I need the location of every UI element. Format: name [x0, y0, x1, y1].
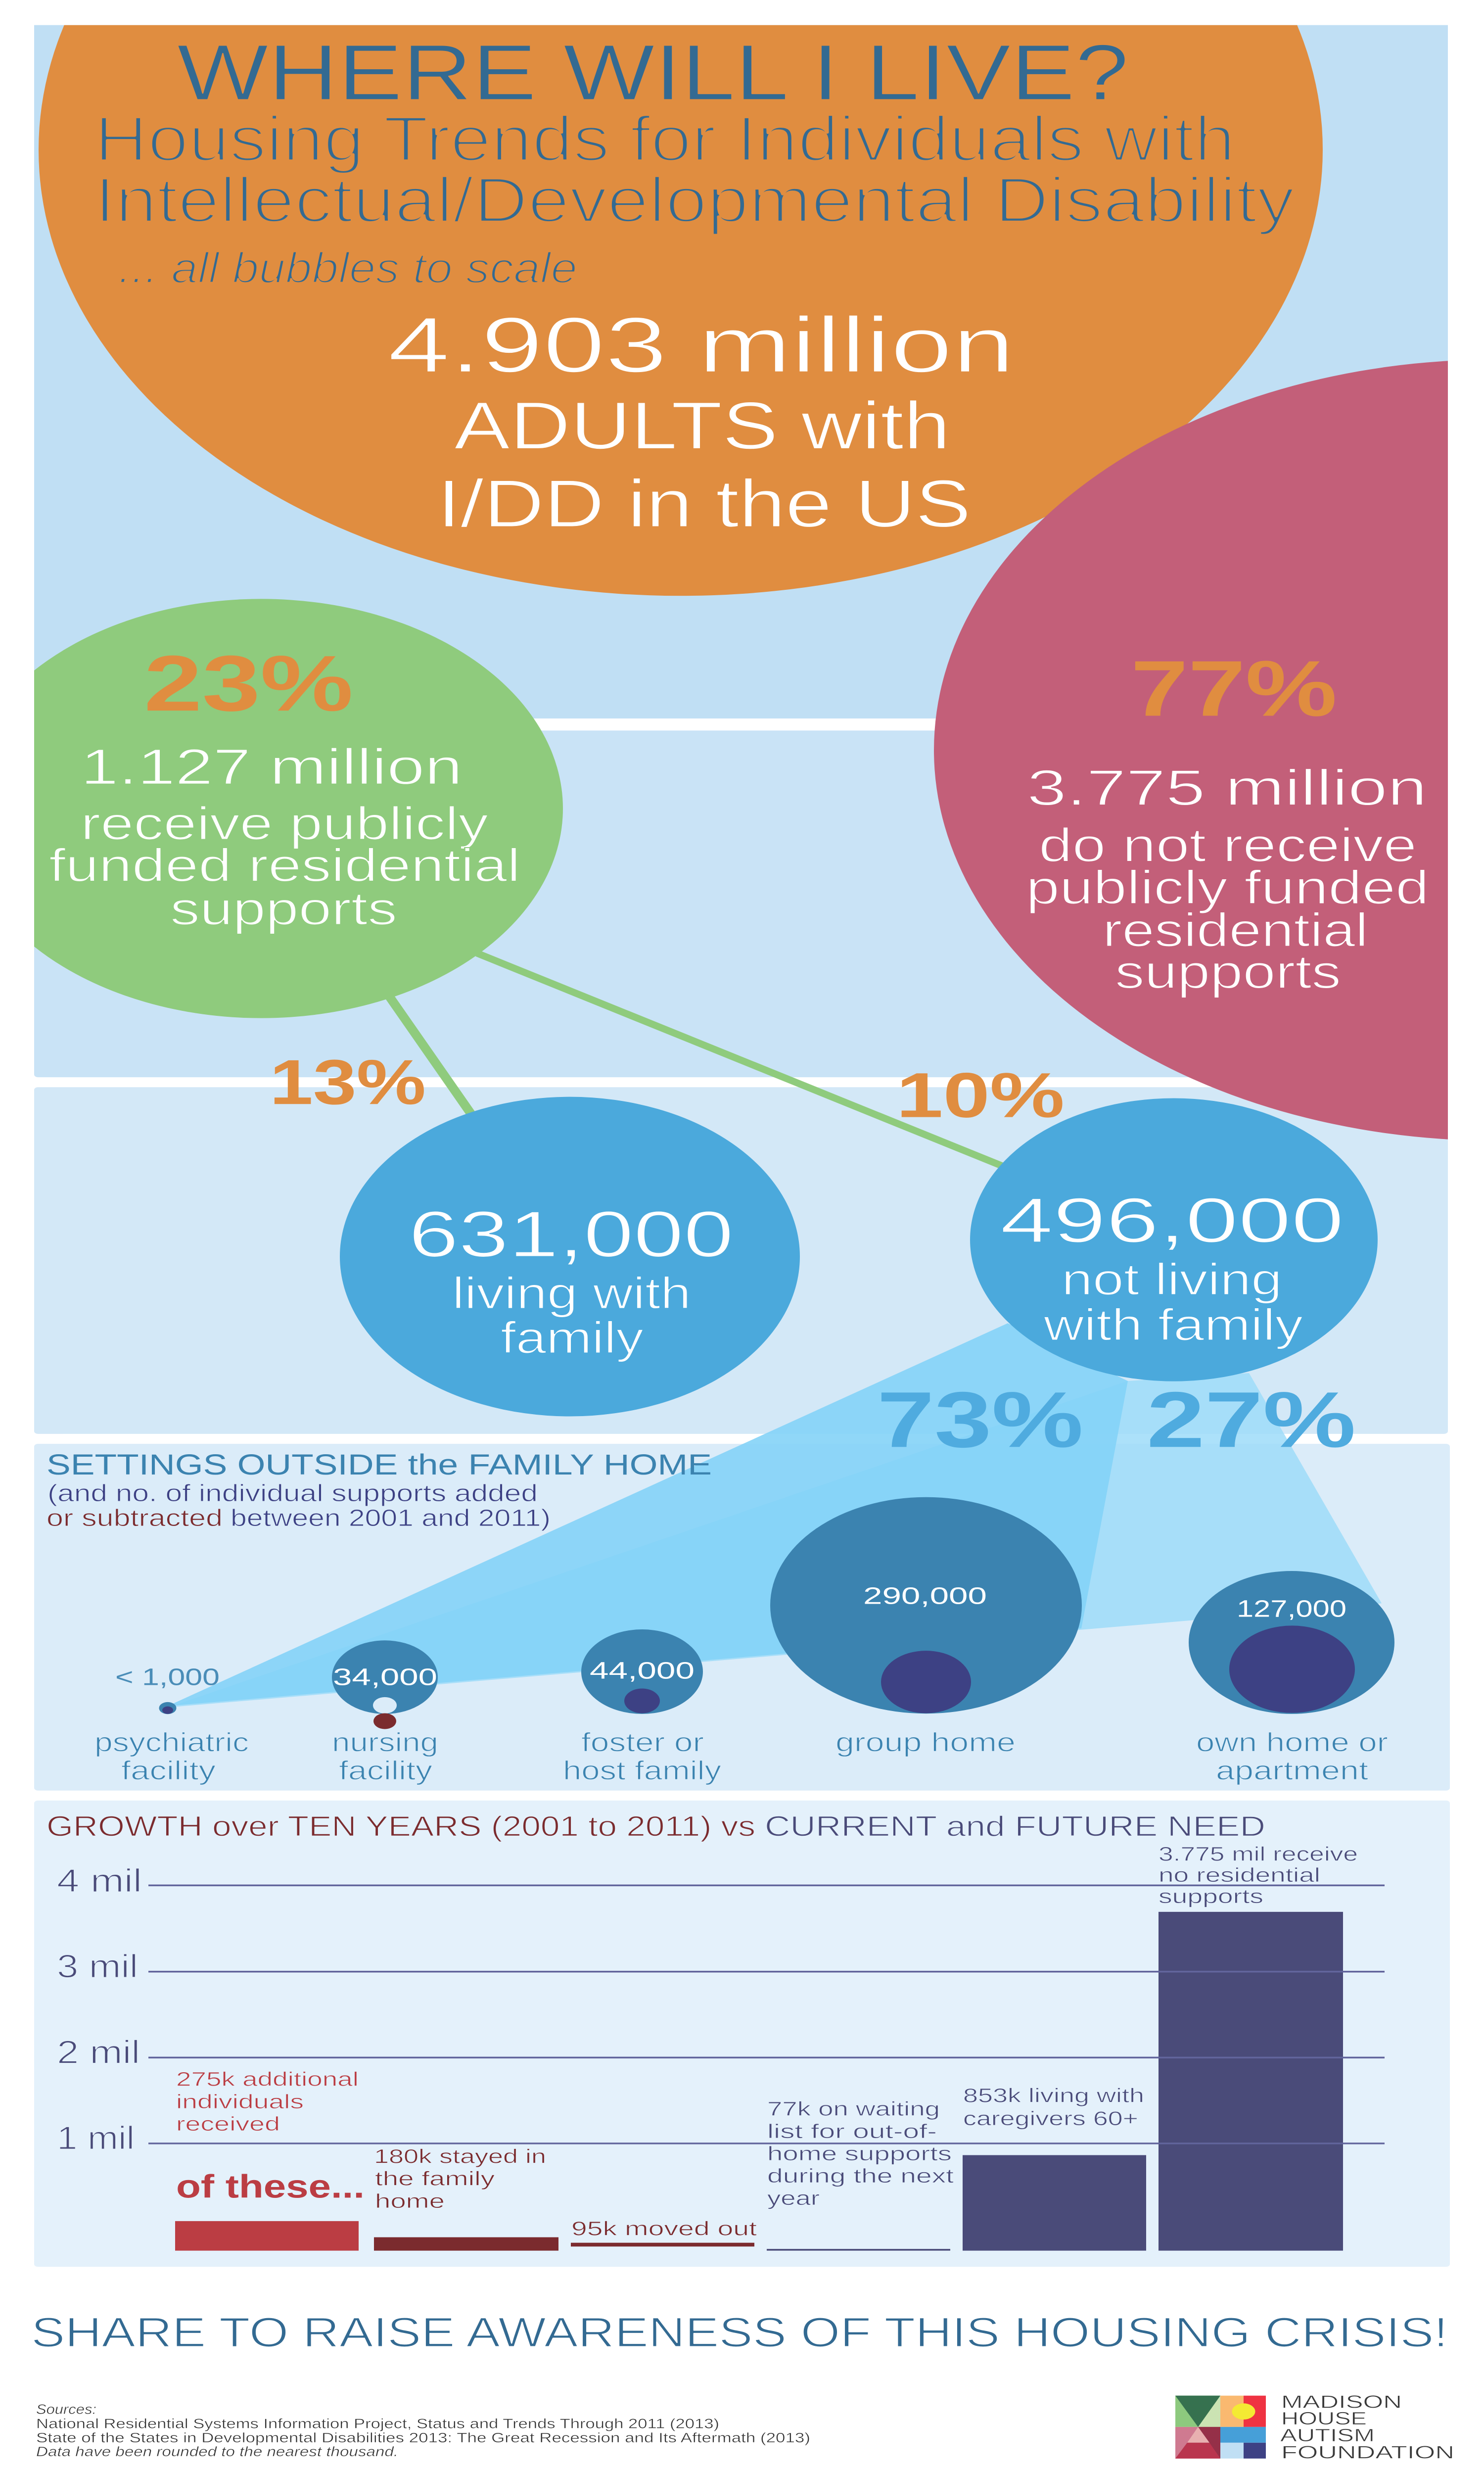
note: 180k stayed: the family [375, 2167, 495, 2190]
scale note: ... all bubbles to scale [118, 244, 577, 292]
value: 496,000 [1000, 1185, 1344, 1256]
sources heading: Sources: [36, 2402, 96, 2417]
psychiatric: psychiatric [94, 1727, 249, 1758]
logo wordmark: FOUNDATION [1281, 2442, 1454, 2463]
pink bubble text [1026, 759, 1429, 999]
bubble: group home [770, 1497, 1082, 1713]
note: 77k waiting list: list for out-of- [767, 2120, 937, 2142]
note: 77k waiting list: during the next [767, 2165, 954, 2187]
bubble: 23 percent (green) [0, 599, 563, 1018]
description line 3: residential [1103, 904, 1368, 956]
bar: 853k with caregivers [963, 2155, 1146, 2251]
axis labels: 2 mil [57, 2034, 140, 2071]
gridlines [148, 1885, 1385, 2143]
apartment: apartment [1216, 1756, 1368, 1786]
heading red part: GROWTH over TEN YEARS (2001 to 2011) vs [46, 1810, 755, 1842]
fan: 27 percent share [168, 1373, 1382, 1708]
value: 44,000: 44,000 [590, 1657, 695, 1684]
bar: 180k stayed [374, 2237, 558, 2251]
bar: 3.775 mil no supports [1159, 1912, 1343, 2251]
bubble: 631,000 living with family [340, 1097, 800, 1416]
13 percent label: 13% [270, 1047, 426, 1118]
value: under 1,000: < 1,000 [115, 1663, 220, 1690]
not living with family text [1000, 1185, 1344, 1350]
fan: 73 percent share [168, 1323, 1128, 1706]
bubble: 496,000 not living with family [970, 1098, 1378, 1381]
total value: 4.903 million [388, 301, 1015, 389]
bar chart [57, 1863, 1385, 2251]
note: 3.775 mil: 3.775 mil receive [1159, 1843, 1358, 1865]
facility: facility [121, 1756, 216, 1786]
axis labels [57, 1863, 142, 2156]
panel: growth background [34, 1801, 1450, 2267]
subheading line 1: (and no. of individual supports added [47, 1479, 538, 1507]
note: 3.775 mil: no residential [1159, 1863, 1320, 1886]
note: 77k waiting list: home supports [767, 2142, 952, 2165]
axis labels: 3 mil [57, 1949, 138, 1985]
note: 95k moved out: 95k moved out [571, 2217, 757, 2239]
bar: 275k additional [175, 2221, 359, 2251]
note: 77k waiting list: 77k on waiting [767, 2097, 940, 2120]
panel: publicly funded background [34, 730, 1448, 1077]
panel: top background [34, 25, 1448, 718]
bubble: own home or apartment [1189, 1571, 1394, 1714]
title block [94, 28, 1295, 292]
description line 1: receive publicly [81, 798, 488, 850]
description line 3: supports [170, 883, 397, 935]
bar: 95k moved out [571, 2243, 754, 2246]
green bubble text [49, 738, 520, 935]
bubble: psychiatric facility [159, 1702, 176, 1714]
data note: Data have been rounded to the nearest thousand. [36, 2444, 398, 2459]
description line 4: supports [1115, 946, 1341, 999]
logo wordmark: HOUSE [1281, 2409, 1367, 2428]
description line 2: funded residential [49, 840, 520, 891]
value: 290,000: 290,000 [863, 1582, 987, 1609]
bubble: nursing facility [332, 1640, 438, 1729]
label line 2: with family [1043, 1300, 1303, 1350]
connector: to not living with family [478, 953, 1001, 1166]
axis labels: 1 mil [57, 2120, 135, 2156]
label line 1: living with [452, 1268, 691, 1318]
connector: to living with family [390, 997, 470, 1113]
sources [36, 2402, 810, 2459]
value: 34,000: 34,000 [333, 1663, 437, 1690]
panel: family living background [34, 1087, 1448, 1434]
note: 77k waiting list [767, 2097, 954, 2209]
note: 275k additional [176, 2068, 359, 2135]
own home or: own home or [1196, 1727, 1388, 1758]
total adults label [388, 301, 1015, 541]
host family: host family [563, 1756, 721, 1786]
note: 275k additional: received [176, 2113, 280, 2135]
nursing: nursing [332, 1727, 438, 1758]
settings heading: SETTINGS OUTSIDE the FAMILY HOME [46, 1449, 712, 1481]
source 1: National Residential Systems Information Project, Status and Trends Through 2011 (2013) [36, 2416, 719, 2431]
facility: facility [339, 1756, 432, 1786]
note: 853k caregivers: 853k living with [963, 2084, 1144, 2106]
callout: of these: of these... [176, 2169, 365, 2205]
bubble: total adults (orange) [39, 0, 1323, 596]
note: 180k stayed: 180k stayed in [374, 2145, 546, 2167]
total label line 2: I/DD in the US [437, 466, 971, 541]
label line 2: family [501, 1313, 644, 1363]
settings subheading [46, 1479, 551, 1531]
77 percent label: 77% [1131, 644, 1337, 732]
subheading line 2: between 2001 and 2011) [231, 1504, 551, 1531]
73 percent label: 73% [877, 1376, 1083, 1464]
logo mark [1175, 2396, 1266, 2459]
description line 2: publicly funded [1026, 861, 1429, 914]
subtitle line 1: Housing Trends for Individuals with [94, 103, 1235, 174]
note: 3.775 mil: supports [1159, 1885, 1263, 1907]
label line 1: not living [1062, 1254, 1282, 1304]
10 percent label: 10% [896, 1059, 1065, 1131]
logo wordmark [1280, 2392, 1454, 2463]
1.127 million: 1.127 million [81, 738, 463, 795]
bar: 77k waiting list [767, 2249, 950, 2251]
note: 853k caregivers: caregivers 60+ [963, 2107, 1138, 2130]
logo wordmark: AUTISM [1280, 2426, 1375, 2445]
23 percent label: 23% [144, 639, 353, 727]
note: 180k stayed: home [375, 2190, 445, 2212]
description line 1: do not receive [1039, 819, 1417, 872]
27 percent label: 27% [1147, 1376, 1356, 1464]
logo wordmark: MADISON [1281, 2392, 1402, 2412]
value: 127,000: 127,000 [1237, 1595, 1346, 1622]
3.775 million: 3.775 million [1027, 759, 1427, 816]
settings values [115, 1582, 1346, 1690]
living with family text [409, 1197, 734, 1363]
title: WHERE WILL I LIVE? [177, 28, 1129, 116]
foster or: foster or [581, 1727, 704, 1758]
growth heading [46, 1810, 1265, 1842]
bubble: 77 percent (pink) [934, 359, 1484, 1141]
note: 275k additional: 275k additional [176, 2068, 359, 2090]
bubble: foster or host family [581, 1629, 703, 1714]
group home: group home [835, 1727, 1016, 1758]
heading navy part: CURRENT and FUTURE NEED [765, 1810, 1265, 1842]
value: 631,000 [409, 1197, 734, 1271]
settings labels [94, 1727, 1388, 1786]
note: 180k stayed [374, 2145, 546, 2212]
source 2: State of the States in Developmental Disabilities 2013: The Great Recession and Its Aftermath (2013) [36, 2430, 810, 2446]
note: 77k waiting list: year [767, 2187, 820, 2209]
axis labels: 4 mil [57, 1863, 142, 1899]
note: 275k additional: individuals [176, 2091, 304, 2113]
note: 853k caregivers [963, 2084, 1144, 2130]
subheading red words: or subtracted [46, 1504, 223, 1531]
panel: settings background [34, 1444, 1450, 1791]
total label line 1: ADULTS with [454, 388, 950, 463]
note: 3.775 mil [1159, 1843, 1358, 1907]
